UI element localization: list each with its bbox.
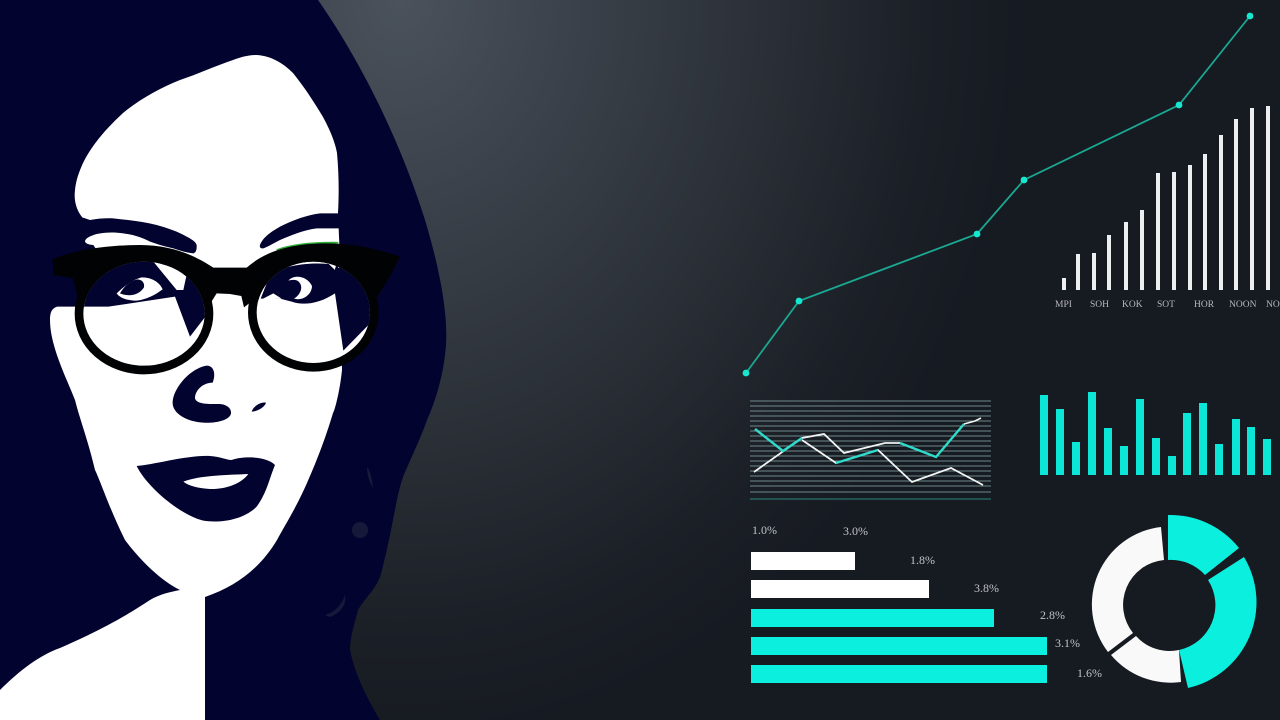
- donut chart: [1092, 515, 1256, 688]
- white series end: [964, 418, 981, 424]
- line chart data points: [743, 13, 1253, 376]
- teeth highlight: [183, 474, 248, 489]
- column axis labels: NOON: [1229, 300, 1257, 310]
- white series one: [754, 434, 900, 472]
- right lens: [258, 262, 370, 356]
- face and neck: [0, 55, 342, 720]
- bar value labels: 3.0%: [843, 524, 868, 538]
- column axis labels: KOK: [1122, 300, 1143, 310]
- donut cyan upper segment: [1168, 515, 1239, 575]
- chart grid lines: [750, 401, 991, 499]
- horizontal bar chart: [751, 523, 1102, 683]
- column axis labels: MPI: [1055, 300, 1072, 310]
- donut white left segment: [1092, 527, 1164, 652]
- portrait: woman with glasses: [0, 0, 446, 720]
- large growth line chart: [743, 13, 1253, 376]
- cyan series: [755, 424, 964, 463]
- column axis labels: SOT: [1157, 300, 1175, 310]
- white columns: [1062, 106, 1270, 290]
- bar value labels: 3.1%: [1055, 636, 1080, 650]
- white series two: [802, 440, 983, 485]
- bar: 1: [751, 552, 855, 570]
- right eyebrow: [260, 213, 341, 248]
- nostril: [252, 403, 266, 412]
- nose: [173, 366, 231, 423]
- hair strand details: [325, 467, 373, 617]
- white column chart: [1055, 106, 1280, 310]
- green glint on frame: [277, 243, 338, 250]
- small multi-line chart: [750, 401, 991, 499]
- left lens: [84, 262, 205, 336]
- bar value labels: 2.8%: [1040, 608, 1065, 622]
- facial features: [47, 213, 400, 522]
- column axis labels: HOR: [1194, 300, 1215, 310]
- bar value labels: 3.8%: [974, 581, 999, 595]
- cyan column chart: [1040, 392, 1271, 475]
- bar value labels: [752, 523, 1102, 680]
- donut cyan lower segment: [1179, 557, 1256, 688]
- lens rims: [79, 257, 209, 370]
- bar value labels: 1.0%: [752, 523, 777, 537]
- column axis labels: [1055, 300, 1280, 310]
- lips: [137, 456, 275, 522]
- bar: 3: [751, 609, 994, 627]
- bar: 5: [751, 665, 1047, 683]
- hair silhouette: [0, 0, 446, 720]
- glasses top band and bridge: [53, 243, 400, 307]
- bar: 4: [751, 637, 1047, 655]
- temple hair and left eyebrow: [47, 217, 197, 307]
- bar value labels: 1.6%: [1077, 666, 1102, 680]
- column axis labels: SOH: [1090, 300, 1109, 310]
- bar: 2: [751, 580, 929, 598]
- bar value labels: 1.8%: [910, 553, 935, 567]
- donut white lower segment: [1111, 636, 1181, 683]
